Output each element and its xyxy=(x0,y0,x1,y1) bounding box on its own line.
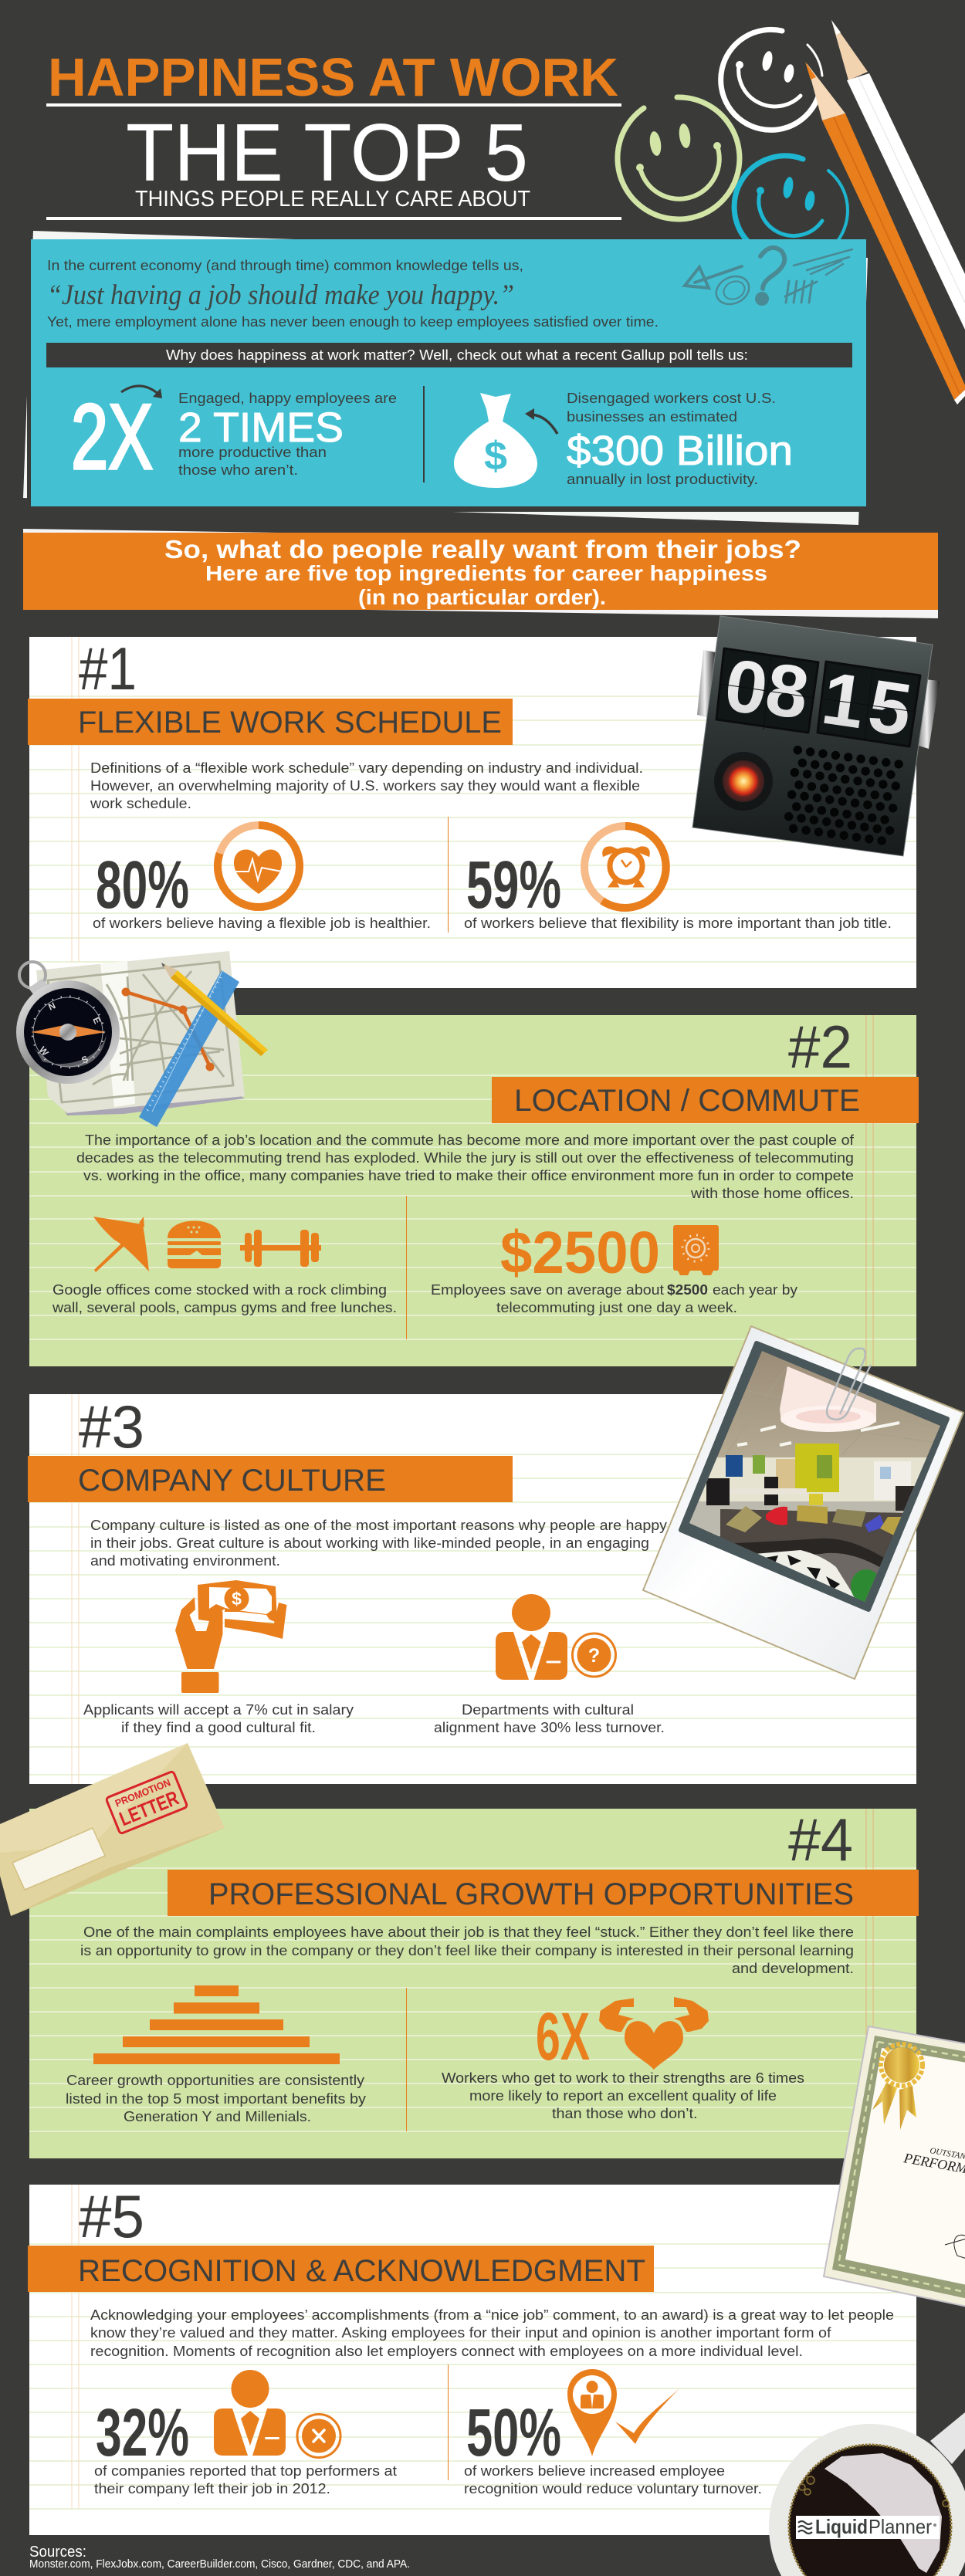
clock display minutes: 5 xyxy=(863,665,916,752)
decoration: smiley faces xyxy=(618,29,848,241)
heading bar: PROFESSIONAL GROWTH OPPORTUNITIES xyxy=(208,1877,854,1911)
subtitle: THINGS PEOPLE REALLY CARE ABOUT xyxy=(135,187,530,212)
text: banner line 2: Here are five top ingredients for career happiness xyxy=(205,561,767,585)
clock display hours: 0 xyxy=(720,644,773,731)
stat: 2x productive: more productive than xyxy=(178,445,327,460)
question bar: Why does happiness at work matter? Well, check out what a recent Gallup poll tells us: xyxy=(166,347,748,363)
text: salary cut xyxy=(83,1702,354,1735)
stat: 300 billion: annually in lost productivity. xyxy=(567,472,758,487)
icon: speaker grille xyxy=(789,750,899,841)
stat: 80 percent xyxy=(93,848,431,931)
text: follow-up line: Yet, mere employment alone has never been enough to keep employees satisfied over time. xyxy=(47,314,659,330)
stat: 2x productive: Engaged, happy employees are xyxy=(178,391,397,406)
icon: location pin with person xyxy=(567,2369,617,2456)
icon: check mark xyxy=(615,2388,680,2444)
number: 2: #2 xyxy=(788,1013,852,1081)
icon: man with question badge xyxy=(496,1594,616,1680)
icon: paper clip xyxy=(827,1349,871,1420)
text: telecommuting savings: each year by xyxy=(713,1282,797,1298)
illustration: flip clock xyxy=(692,616,940,856)
icon: gold rosette xyxy=(872,2044,923,2130)
text: telecommuting savings xyxy=(431,1282,797,1315)
icon: money bag xyxy=(454,393,537,488)
icon: white pencil xyxy=(831,20,965,330)
stat: 2x productive: those who aren’t. xyxy=(178,462,298,478)
icon: green smiley xyxy=(618,97,740,219)
stat: 300 billion: $300 Billion xyxy=(567,428,793,474)
text: body: is an opportunity to grow in the company or they don’t feel like their company is interested in their personal learning xyxy=(80,1943,854,1958)
text: career growth: Generation Y and Millenials. xyxy=(124,2109,311,2124)
text: body xyxy=(80,1924,854,1976)
icon: man with question badge: ? xyxy=(588,1645,600,1667)
heading bar xyxy=(28,1456,513,1502)
icon: clock knobs xyxy=(697,650,940,749)
icon: cup handle xyxy=(930,2412,965,2464)
stat: 300 billion: businesses an estimated xyxy=(567,409,737,425)
icon: burger xyxy=(168,1221,221,1268)
icon: money bag: $ xyxy=(484,434,507,479)
clock display minutes xyxy=(817,657,920,752)
stat: 32 percent: of companies reported that top performers at xyxy=(94,2463,397,2479)
text: intro line: In the current economy (and through time) common knowledge tells us, xyxy=(47,258,523,273)
text: salary cut: Applicants will accept a 7% cut in salary xyxy=(83,1702,354,1718)
icon: map xyxy=(36,951,245,1115)
header: title block xyxy=(46,47,621,220)
panel: #4 professional growth xyxy=(29,1806,919,2158)
icon: white smiley xyxy=(721,29,822,130)
heading bar xyxy=(28,699,513,745)
heading bar xyxy=(28,2246,654,2292)
route line xyxy=(122,988,215,1071)
text: body: Definitions of a “flexible work schedule” vary depending on industry and individual. xyxy=(90,760,643,776)
clock body xyxy=(692,616,933,856)
icon: umbrella xyxy=(93,1217,149,1272)
heading bar xyxy=(168,1870,919,1916)
text: strengths: more likely to report an excellent quality of life xyxy=(469,2088,777,2104)
icon: ruler xyxy=(139,970,239,1127)
logo: liquidplanner: Planner xyxy=(868,2515,932,2538)
text: body xyxy=(90,760,643,811)
stat: 80 percent: 80% xyxy=(96,848,189,922)
heading bar: RECOGNITION & ACKNOWLEDGMENT xyxy=(78,2254,645,2288)
text: career growth: Career growth opportunities are consistently xyxy=(66,2073,364,2088)
text: google offices: wall, several pools, campus gyms and free lunches. xyxy=(52,1300,397,1315)
icon: orange pencil xyxy=(805,62,965,405)
stat: 59 percent xyxy=(464,848,892,931)
text: banner line 3: (in no particular order). xyxy=(358,585,606,609)
icon: safe xyxy=(673,1225,719,1275)
stat: 6x: 6X xyxy=(536,1999,590,2074)
stat: 50 percent xyxy=(464,2395,762,2496)
text: handwritten quote: “Just having a job should make you happy.” xyxy=(47,279,514,311)
stat: 2x productive: 2 TIMES xyxy=(178,405,344,451)
text: body: The importance of a job’s location and the commute has become more and more important over the past couple of xyxy=(85,1132,855,1148)
stat: 2x productive xyxy=(71,385,397,489)
text: body: vs. working in the office, many companies have tried to make their office environment more fun in order to compete xyxy=(83,1168,854,1183)
stamp: promotion letter: PROMOTION xyxy=(113,1776,172,1809)
icon: cup and coffee xyxy=(769,2424,965,2576)
icon: hand with money xyxy=(175,1580,287,1693)
icon: red led xyxy=(714,752,773,811)
stat: 32 percent: 32% xyxy=(96,2395,189,2470)
text: telecommuting savings: $2500 xyxy=(667,1282,708,1298)
panel: #2 location commute xyxy=(29,1013,919,1366)
icon: barbell xyxy=(240,1230,321,1267)
stat: 59 percent: of workers believe that flexibility is more important than job title. xyxy=(464,916,892,931)
illustration: promotion letter envelope xyxy=(0,1743,225,1916)
text: google offices xyxy=(52,1282,397,1315)
icon: man with x badge xyxy=(214,2370,340,2458)
title: happiness at work: HAPPINESS AT WORK xyxy=(48,47,618,107)
heading bar: COMPANY CULTURE xyxy=(78,1464,386,1498)
stat: 32 percent: their company left their job in 2012. xyxy=(94,2481,330,2496)
number: 1: #1 xyxy=(79,635,137,702)
panel: #5 recognition xyxy=(28,2182,916,2535)
chart: ring 59 percent with alarm clock xyxy=(584,826,666,908)
sources: Monster.com, FlexJobx.com, CareerBuilder.com, Cisco, Gardner, CDC, and APA. xyxy=(29,2557,410,2571)
illustration: certificate xyxy=(824,2026,965,2316)
title: the top 5: THE TOP 5 xyxy=(126,107,528,198)
panel: #1 flexible work schedule xyxy=(28,635,916,988)
stat: 2x productive: 2X xyxy=(71,385,153,489)
text: body: recognition. Moments of recognition also let employers connect with employees on a more individual level. xyxy=(90,2344,803,2359)
text: body: Company culture is listed as one of the most important reasons why people are happy xyxy=(90,1518,667,1533)
text: strengths xyxy=(442,2070,804,2121)
logo: liquidplanner: Liquid xyxy=(815,2515,868,2538)
icon: compass xyxy=(16,962,120,1084)
decoration: pencils xyxy=(805,20,965,405)
sources xyxy=(29,2544,410,2571)
heading bar: FLEXIBLE WORK SCHEDULE xyxy=(78,706,502,740)
illustration: coffee cup with logo xyxy=(769,2412,965,2576)
stat: 2500 dollars: $2500 xyxy=(500,1220,660,1286)
icon: compass: N xyxy=(46,1000,57,1013)
number: 5: #5 xyxy=(79,2182,144,2250)
text: body xyxy=(90,1518,667,1569)
panel: #3 company culture xyxy=(28,1393,916,1784)
text: body xyxy=(90,2307,894,2359)
arrow: to money bag xyxy=(525,408,557,434)
text: body xyxy=(76,1132,855,1201)
stamp: promotion letter: LETTER xyxy=(116,1786,182,1830)
text: body: in their jobs. Great culture is about working with like-minded people, in an engaging xyxy=(90,1535,649,1551)
heading bar xyxy=(492,1077,919,1123)
text: turnover xyxy=(434,1702,665,1735)
envelope window xyxy=(12,1828,105,1890)
icon: compass: W xyxy=(37,1044,51,1058)
text: google offices: Google offices come stocked with a rock climbing xyxy=(52,1282,387,1298)
stat: 59 percent: 59% xyxy=(466,848,561,922)
text: career growth xyxy=(66,2073,366,2124)
stat: 300 billion xyxy=(567,391,793,487)
text: body: decades as the telecommuting trend has exploded. While the jury is still out over the effectiveness of telecommuting xyxy=(76,1150,854,1166)
text: banner line 1: So, what do people really want from their jobs? xyxy=(164,535,801,564)
text: salary cut: if they find a good cultural fit. xyxy=(121,1720,316,1735)
stat: 50 percent: 50% xyxy=(466,2395,561,2470)
text: strengths: Workers who get to work to their strengths are 6 times xyxy=(442,2070,804,2086)
text: turnover: alignment have 30% less turnover. xyxy=(434,1720,665,1735)
text: body: and development. xyxy=(732,1961,854,1976)
banner: so what do people want xyxy=(23,529,938,618)
heading bar: LOCATION / COMMUTE xyxy=(514,1084,860,1118)
icon: yellow pencil xyxy=(161,963,268,1056)
text: body: know they’re valued and they matter. Asking employees for their input and opinion is another important form of xyxy=(90,2325,832,2341)
stat: 300 billion: Disengaged workers cost U.S. xyxy=(567,391,776,406)
clock display hours: 8 xyxy=(760,648,814,735)
text: body: One of the main complaints employees have about their job is that they feel “stuck.” Either they don’t feel like there xyxy=(83,1924,854,1940)
text: body: and motivating environment. xyxy=(90,1553,280,1569)
text: body: However, an overwhelming majority of U.S. workers say they would want a flexible xyxy=(90,778,640,794)
text: strengths: than those who don’t. xyxy=(552,2106,698,2121)
signature xyxy=(945,2235,965,2259)
text: career growth: listed in the top 5 most important benefits by xyxy=(66,2091,366,2107)
logo: liquidplanner xyxy=(796,2515,940,2539)
sources: Sources: xyxy=(29,2544,86,2561)
icon: compass: E xyxy=(90,1015,103,1026)
icon: sketch doodles xyxy=(685,248,852,310)
number: 4: #4 xyxy=(788,1806,853,1874)
icon: teal smiley xyxy=(734,156,848,241)
panel: intro teal card xyxy=(23,231,868,525)
text: body: with those home offices. xyxy=(690,1186,854,1201)
text: telecommuting savings: Employees save on average about xyxy=(431,1282,664,1298)
question bar xyxy=(46,343,852,367)
text: telecommuting savings: telecommuting just one day a week. xyxy=(496,1300,737,1315)
icon: pyramid steps xyxy=(93,1985,340,2064)
illustration: map, compass, pencil and ruler xyxy=(16,951,268,1127)
stat: 80 percent: of workers believe having a flexible job is healthier. xyxy=(93,916,431,931)
text: body: Acknowledging your employees’ accomplishments (from a “nice job” comment, to an award) is a great way to let people xyxy=(90,2307,894,2323)
number: 3: #3 xyxy=(79,1393,144,1461)
clock display hours xyxy=(716,644,818,735)
stamp: promotion letter xyxy=(106,1771,188,1834)
stat: 50 percent: recognition would reduce voluntary turnover. xyxy=(464,2481,762,2496)
clock display minutes: 1 xyxy=(817,657,870,744)
icon: hand with money: $ xyxy=(232,1589,242,1609)
illustration: polaroid office photo xyxy=(643,1326,963,1679)
text: turnover: Departments with cultural xyxy=(462,1702,634,1718)
icon: muscle heart xyxy=(599,1997,709,2070)
stat: 50 percent: of workers believe increased employee xyxy=(464,2463,725,2479)
stat: 32 percent xyxy=(94,2395,397,2496)
chart: ring 80 percent with heart xyxy=(218,825,300,907)
icon: compass: S xyxy=(80,1054,90,1066)
photo: office interior xyxy=(679,1347,946,1606)
text: body: work schedule. xyxy=(90,796,191,811)
